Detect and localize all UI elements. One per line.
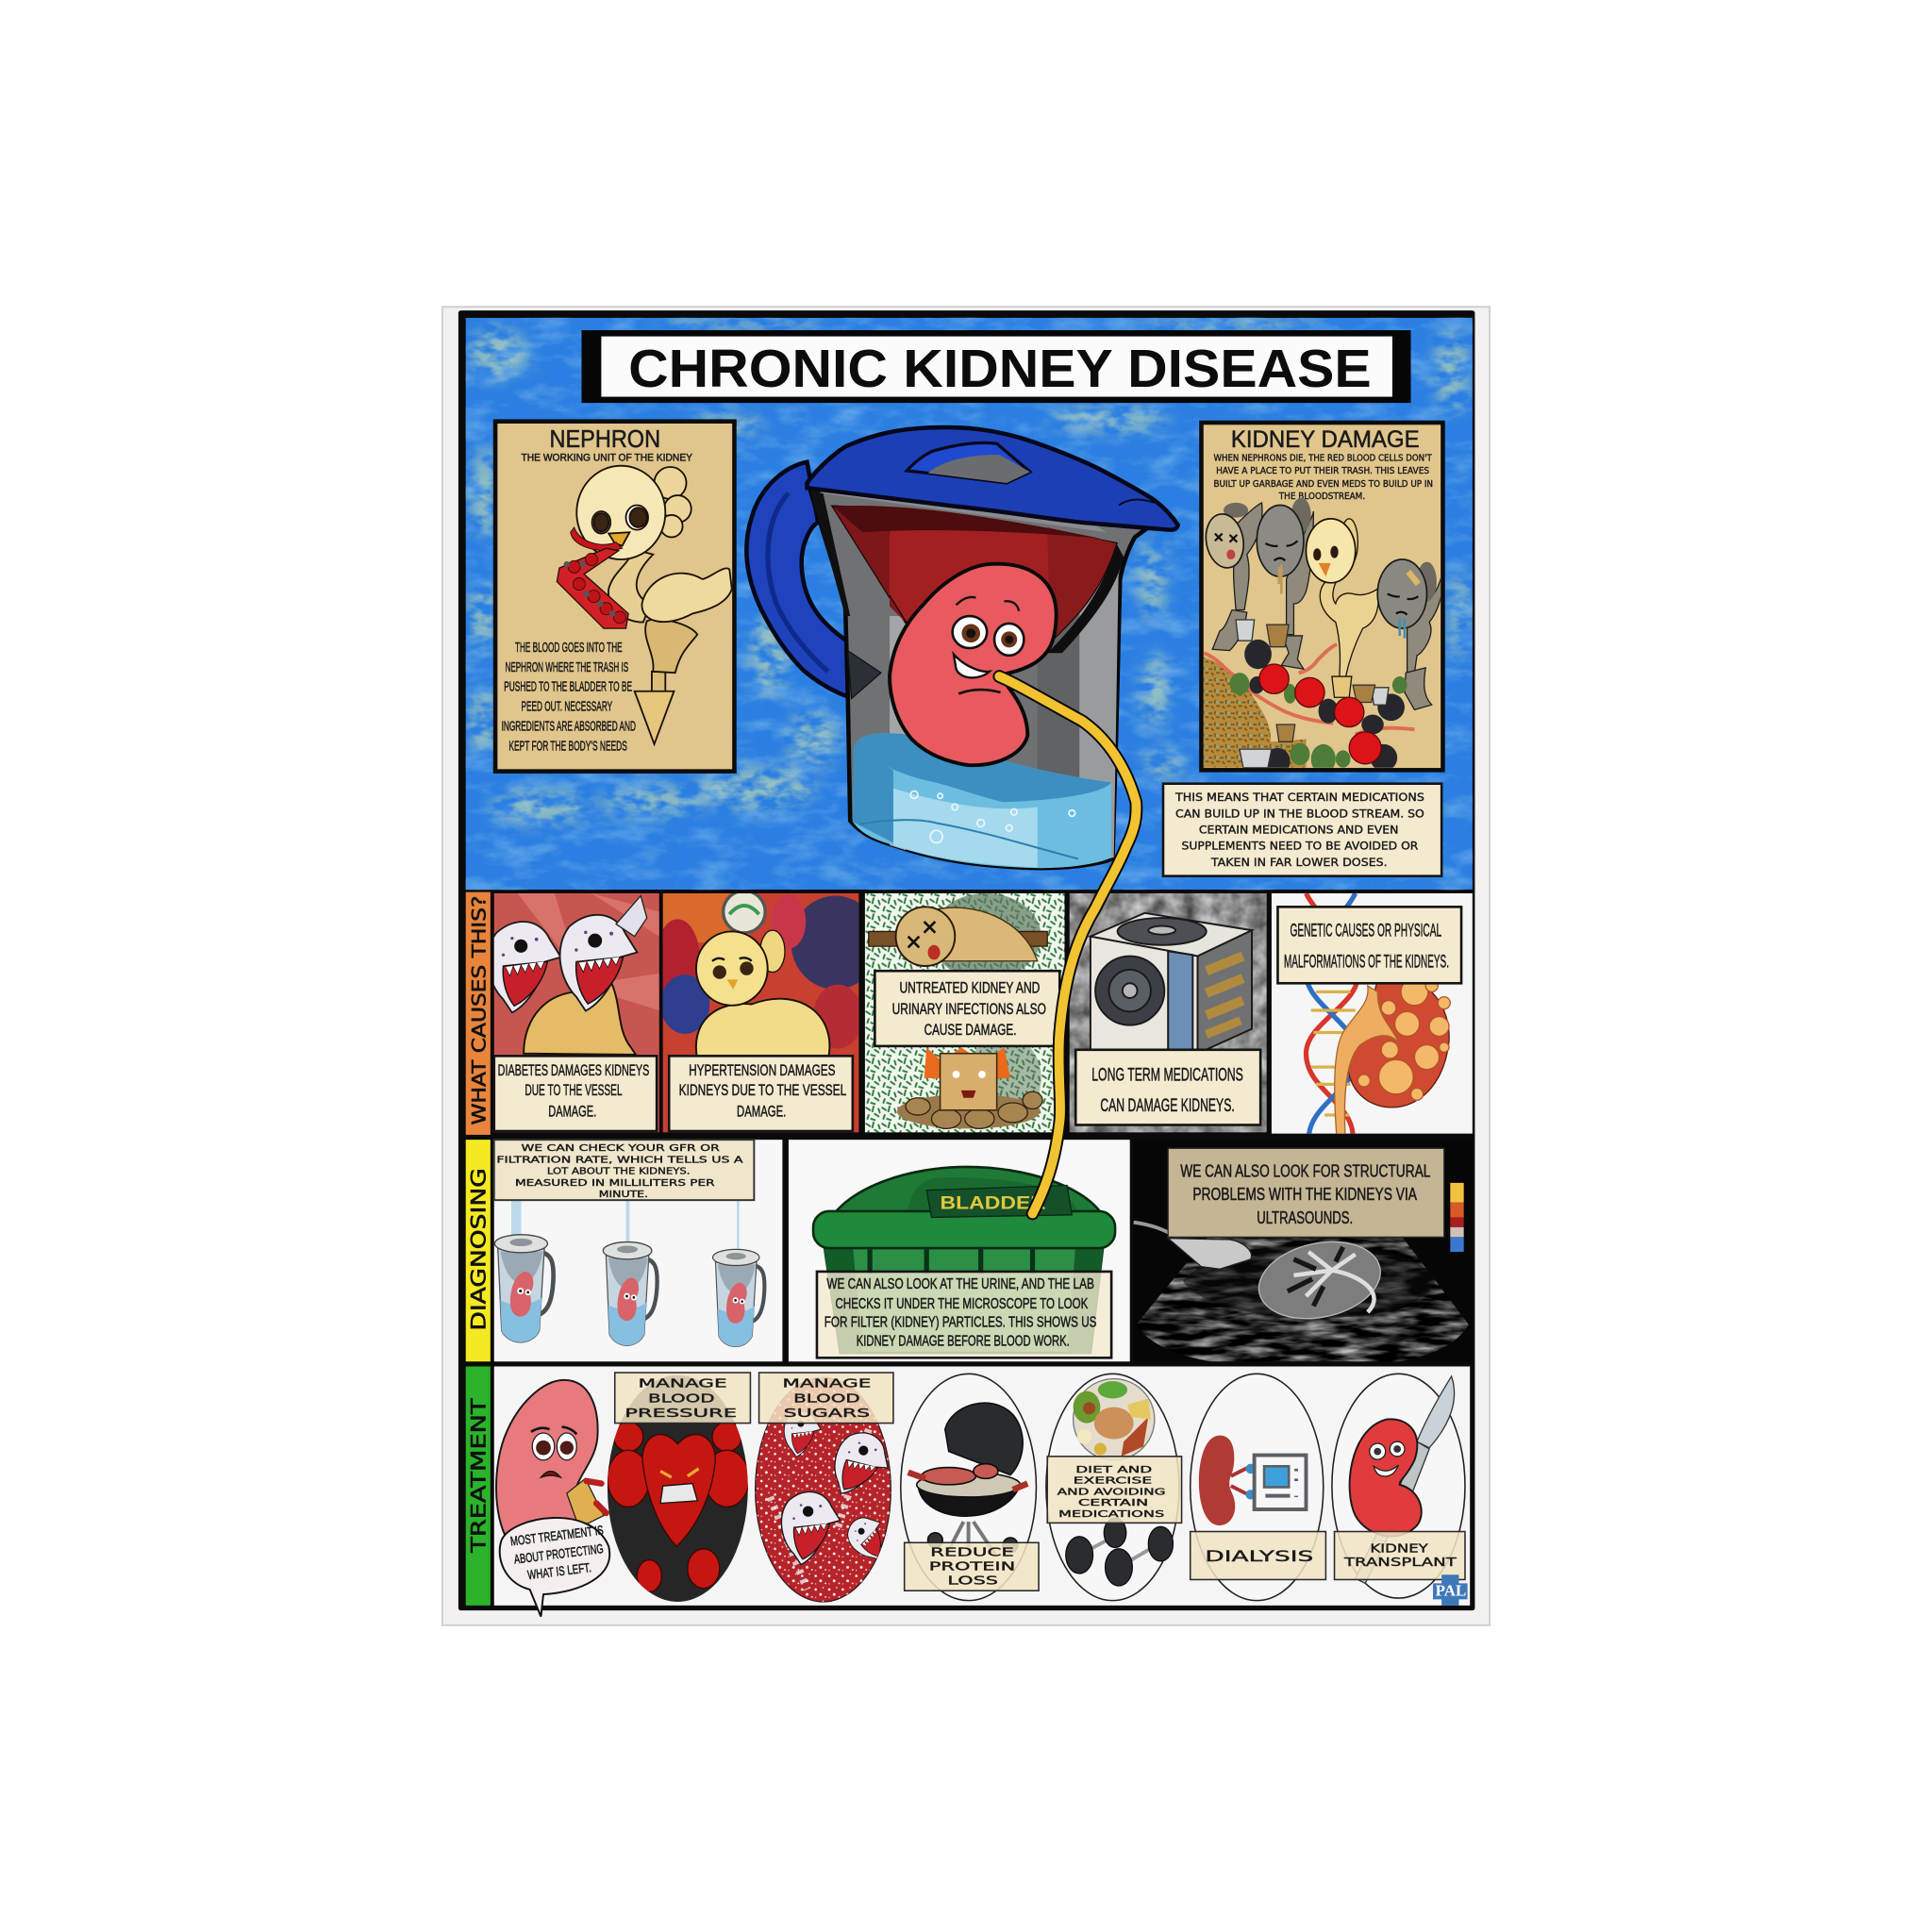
- icon: DNA helix: [1306, 893, 1357, 1140]
- text box: genetic causes: GENETIC CAUSES OR PHYSICAL: [1291, 921, 1441, 941]
- text: nephron description: INGREDIENTS ARE ABSORBED AND: [502, 720, 636, 735]
- section label: what causes this: WHAT CAUSES THIS?: [469, 896, 491, 1124]
- pitcher glass: [809, 488, 1148, 868]
- text box: medications warning: [1163, 784, 1441, 876]
- callout: speech bubble: [500, 1518, 609, 1617]
- text box: GFR: MEASURED IN MILLILITERS PER: [515, 1178, 715, 1189]
- icon: pitcher three: [713, 1249, 764, 1346]
- text box: hypertension: HYPERTENSION DAMAGES: [689, 1061, 836, 1079]
- text box: GFR: MINUTE.: [599, 1190, 648, 1200]
- text box: medications warning: CAN BUILD UP IN THE BLOOD STREAM. SO: [1175, 808, 1424, 821]
- panel: GFR: [494, 1140, 782, 1361]
- text: nephron description: [502, 641, 636, 754]
- icon: pitcher two: [603, 1242, 658, 1345]
- text box: medications warning: THIS MEANS THAT CERTAIN MEDICATIONS: [1174, 791, 1424, 804]
- text box: kidney transplant: TRANSPLANT: [1343, 1555, 1457, 1569]
- text box: medications warning: CERTAIN MEDICATIONS AND EVEN: [1199, 824, 1398, 837]
- ureter tube from kidney to bladder: [999, 676, 1136, 1214]
- icon: bladder bin: [813, 1167, 1115, 1353]
- text box: urine check: WE CAN ALSO LOOK AT THE URINE, AND THE LAB: [826, 1276, 1094, 1292]
- text box: manage blood pressure: BLOOD: [648, 1391, 715, 1406]
- icon: pitcher one: [494, 1235, 554, 1342]
- pitcher handle: [746, 462, 850, 697]
- text: kidney damage description: WHEN NEPHRONS DIE, THE RED BLOOD CELLS DON'T: [1214, 453, 1432, 463]
- section label: what causes this: [466, 892, 491, 1135]
- text: kidney damage description: [1214, 453, 1433, 502]
- gray nephron bodies: [1212, 503, 1443, 709]
- text: nephron description: THE BLOOD GOES INTO THE: [515, 641, 623, 656]
- text box: diabetes: [494, 1056, 657, 1131]
- icon: nephron bird: [557, 466, 732, 744]
- logo: PAL: PAL: [1436, 1581, 1466, 1599]
- text box: diet and exercise: EXERCISE: [1074, 1476, 1152, 1487]
- oval: kidney transplant: [1332, 1374, 1465, 1598]
- text box: infection: UNTREATED KIDNEY AND: [899, 980, 1040, 997]
- text box: diet and exercise: AND AVOIDING: [1058, 1487, 1166, 1497]
- icon: ultrasound probe: [1134, 1223, 1252, 1269]
- icon: colour scale: [1450, 1183, 1464, 1252]
- text box: diet and exercise: CERTAIN: [1078, 1498, 1148, 1508]
- trash bags and cans: [1244, 640, 1405, 775]
- text box: manage blood sugars: BLOOD: [793, 1391, 860, 1406]
- text box: hypertension: [669, 1056, 853, 1131]
- text box: infection: CAUSE DAMAGE.: [924, 1022, 1017, 1039]
- text box: reduce protein loss: REDUCE: [930, 1546, 1014, 1560]
- icon: bladder bin: BLADDER: [941, 1192, 1046, 1213]
- text: nephron description: NEPHRON WHERE THE TRASH IS: [506, 660, 628, 675]
- text box: diabetes: DIABETES DAMAGES KIDNEYS: [498, 1061, 649, 1079]
- text box: manage blood pressure: MANAGE: [639, 1377, 727, 1391]
- text box: GFR: [494, 1140, 754, 1200]
- text box: ultrasound: PROBLEMS WITH THE KIDNEYS VIA: [1192, 1184, 1418, 1204]
- icon: air conditioner unit: [1091, 913, 1252, 1054]
- text box: kidney transplant: KIDNEY: [1370, 1541, 1428, 1556]
- text box: genetic causes: [1277, 907, 1461, 983]
- text box: GFR: FILTRATION RATE, WHICH TELLS US A: [496, 1155, 743, 1165]
- text box: hypertension: KIDNEYS DUE TO THE VESSEL: [679, 1081, 846, 1099]
- text box: urine check: [817, 1272, 1111, 1357]
- text box: long term medications: CAN DAMAGE KIDNEYS.: [1100, 1095, 1235, 1116]
- illustration: water filter pitcher: [746, 427, 1178, 868]
- panel: ultrasound: [1134, 1140, 1473, 1370]
- oval: dialysis: [1191, 1374, 1324, 1601]
- text: kidney damage description: THE BLOODSTREAM.: [1278, 491, 1365, 502]
- text box: dialysis: DIALYSIS: [1205, 1547, 1313, 1565]
- text box: manage blood pressure: PRESSURE: [625, 1407, 737, 1421]
- panel: kidney damage card: [1201, 423, 1443, 775]
- text box: long term medications: [1075, 1050, 1260, 1124]
- text box: dialysis: [1191, 1532, 1325, 1579]
- oval: manage blood sugars: [752, 1374, 898, 1603]
- yellow nephron: [1320, 581, 1378, 677]
- oval: diet and exercise: [1046, 1374, 1179, 1601]
- text box: medications warning: TAKEN IN FAR LOWER DOSES.: [1210, 856, 1388, 869]
- text box: reduce protein loss: LOSS: [947, 1574, 998, 1589]
- panel: urine check: [789, 1140, 1130, 1361]
- text box: manage blood pressure: [615, 1373, 750, 1424]
- panel: top blue hero: [466, 318, 1473, 890]
- text box: urine check: FOR FILTER (KIDNEY) PARTICLES. THIS SHOWS US: [824, 1315, 1096, 1331]
- text box: GFR: WE CAN CHECK YOUR GFR OR: [521, 1143, 720, 1154]
- pitcher lid: [808, 427, 1178, 530]
- icon: polycystic kidney: [1348, 976, 1449, 1108]
- text box: urine check: KIDNEY DAMAGE BEFORE BLOOD WORK.: [857, 1333, 1070, 1349]
- icon: grill: [908, 1403, 1027, 1555]
- panel: nephron card: [495, 422, 734, 772]
- text box: manage blood sugars: MANAGE: [782, 1377, 871, 1391]
- gray nephron with bandage: [1377, 559, 1426, 628]
- panel: long term medications: [1070, 893, 1267, 1132]
- heading: kidney damage: KIDNEY DAMAGE: [1231, 427, 1420, 453]
- text box: medications warning: SUPPLEMENTS NEED TO BE AVOIDED OR: [1182, 840, 1418, 853]
- text box: ultrasound: WE CAN ALSO LOOK FOR STRUCTURAL: [1180, 1160, 1430, 1180]
- subheading: working unit: THE WORKING UNIT OF THE KIDNEY: [521, 452, 693, 463]
- paper background: [442, 307, 1490, 1625]
- section label: treatment: TREATMENT: [468, 1398, 491, 1554]
- oval: manage blood pressure: [608, 1375, 749, 1602]
- title banner: [581, 330, 1411, 403]
- text box: diet and exercise: MEDICATIONS: [1058, 1509, 1164, 1520]
- text box: diabetes: DUE TO THE VESSEL: [525, 1081, 623, 1099]
- icon: damaged nephrons and trash: [1202, 498, 1443, 775]
- text: nephron description: KEPT FOR THE BODY'S NEEDS: [508, 739, 627, 754]
- text box: hypertension: DAMAGE.: [737, 1102, 786, 1120]
- icon: scalpel: [1356, 1376, 1455, 1583]
- icon: sad kidney: [496, 1380, 607, 1541]
- text box: genetic causes: MALFORMATIONS OF THE KIDNEYS.: [1284, 951, 1449, 972]
- icon: happy kidney: [1350, 1419, 1422, 1537]
- text: nephron description: PEED OUT. NECESSARY: [521, 700, 612, 715]
- callout: speech bubble: ABOUT PROTECTING: [513, 1541, 604, 1567]
- text box: reduce protein loss: [905, 1542, 1039, 1591]
- text box: infection: [874, 971, 1059, 1046]
- section label: diagnosing: DIAGNOSING: [468, 1168, 491, 1331]
- heading: nephron: NEPHRON: [550, 425, 660, 453]
- title banner: CHRONIC KIDNEY DISEASE: [628, 339, 1372, 398]
- section label: treatment: [466, 1366, 491, 1606]
- text box: ultrasound: [1168, 1148, 1444, 1237]
- icon: dumbbells: [1066, 1518, 1173, 1586]
- text box: diet and exercise: [1047, 1457, 1182, 1523]
- text box: infection: URINARY INFECTIONS ALSO: [892, 1001, 1046, 1018]
- pitcher water: [853, 733, 1111, 868]
- outer black frame: [458, 310, 1474, 1610]
- text box: diet and exercise: DIET AND: [1075, 1465, 1153, 1475]
- panel: infection: [865, 893, 1064, 1132]
- icon: food plate: [1074, 1379, 1155, 1460]
- filter funnel with blood: [833, 507, 1116, 660]
- text box: manage blood sugars: [759, 1373, 893, 1424]
- text box: urine check: CHECKS IT UNDER THE MICROSCOPE TO LOOK: [836, 1296, 1089, 1312]
- kidney character: [890, 564, 1057, 765]
- text: kidney damage description: BUILT UP GARBAGE AND EVEN MEDS TO BUILD UP IN: [1214, 479, 1433, 490]
- panel: diabetes: [488, 893, 659, 1132]
- panel: treatment: [494, 1366, 1470, 1617]
- text box: ultrasound: ULTRASOUNDS.: [1257, 1208, 1353, 1227]
- text box: GFR: LOT ABOUT THE KIDNEYS.: [547, 1167, 690, 1177]
- text box: diabetes: DAMAGE.: [548, 1102, 596, 1120]
- callout: speech bubble: WHAT IS LEFT.: [526, 1560, 592, 1582]
- panel: genetic causes: [1272, 893, 1473, 1140]
- oval: reduce protein loss: [901, 1374, 1036, 1601]
- text box: long term medications: LONG TERM MEDICATIONS: [1091, 1064, 1243, 1085]
- text box: reduce protein loss: PROTEIN: [929, 1560, 1015, 1574]
- text: nephron description: PUSHED TO THE BLADDER TO BE: [504, 680, 632, 695]
- text box: manage blood sugars: SUGARS: [784, 1407, 870, 1421]
- text box: kidney transplant: [1335, 1532, 1465, 1579]
- callout: speech bubble: MOST TREATMENT IS: [509, 1524, 604, 1548]
- panel: hypertension: [662, 892, 858, 1132]
- logo: PAL: [1433, 1574, 1468, 1606]
- icon: kidney and dialysis machine: [1199, 1436, 1306, 1525]
- section label: diagnosing: [466, 1140, 491, 1361]
- text: kidney damage description: HAVE A PLACE TO PUT THEIR TRASH. THIS LEAVES: [1216, 466, 1429, 476]
